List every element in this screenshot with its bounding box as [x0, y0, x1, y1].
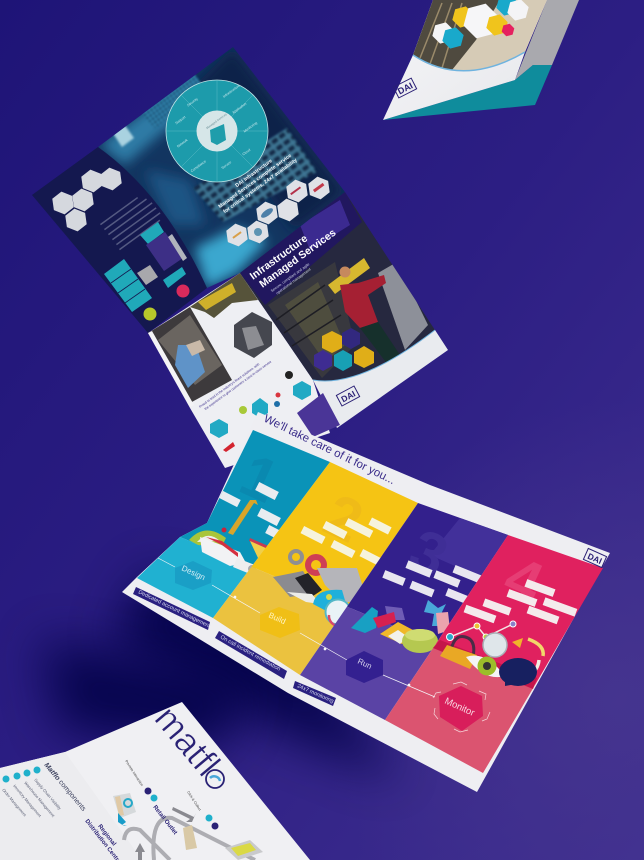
- text block: body copy: [100, 197, 161, 250]
- title: operational management: [275, 267, 313, 295]
- number 3: 3: [400, 516, 458, 591]
- logo: DAI: [393, 78, 417, 98]
- numbered list: Warehouse Management: [23, 780, 56, 819]
- illustration: servers and gears: [273, 551, 363, 626]
- title: [248, 217, 346, 302]
- wheel: services: Security: [186, 97, 199, 107]
- wheel: services: Infrastructure: [222, 84, 241, 99]
- hexagon: monitor: Monitor: [443, 696, 476, 719]
- heading: matflo components: Matflo components: [42, 762, 87, 813]
- service hexagons: [314, 328, 374, 371]
- label: dedicated account management: Dedicated account management: [137, 589, 211, 630]
- labels: [382, 560, 481, 604]
- column 1: design: [137, 430, 330, 618]
- panel: cover photo: [240, 192, 435, 380]
- text block: photo intro: DAI Infrastructure: [234, 158, 274, 189]
- diagram: distribution network: Regional: [96, 824, 117, 848]
- wheel: services: Support: [174, 115, 186, 125]
- labels: [219, 482, 289, 543]
- brochure: top right folded: [383, 0, 579, 120]
- numbered list: Inventory Management: [12, 783, 43, 819]
- panel: back panel white: [148, 273, 330, 468]
- hexagon: design: [175, 561, 212, 590]
- photo: yellow cables: [190, 273, 258, 318]
- illustration: run tools: [351, 600, 450, 653]
- hexagon: build: Build: [267, 611, 287, 626]
- panel: dark navy left: [32, 147, 207, 333]
- wheel: services: [166, 80, 268, 182]
- hexagon: monitor: [433, 682, 490, 732]
- logo: DAI: [583, 548, 607, 568]
- logo: DAI: DAI: [586, 551, 604, 566]
- illustration: monitor icons: [440, 621, 543, 686]
- icon: pink close badge: [176, 284, 190, 298]
- wheel: services: Monitoring: [243, 121, 258, 133]
- column 3: run: [300, 503, 508, 720]
- photo with hexagons: [413, 0, 547, 71]
- process boxes: [104, 222, 187, 312]
- labels: [464, 579, 577, 624]
- number 1: 1: [231, 441, 289, 516]
- hexagon: run: Run: [356, 657, 373, 671]
- text block: photo intro: Managed Services complete service: [218, 153, 293, 210]
- paper: [122, 412, 610, 792]
- logo: DAI: DAI: [396, 80, 414, 96]
- text block: photo intro: for critical systems, 24x7 availability: [222, 157, 299, 215]
- diagram: distribution network: Premise Interaction: [124, 759, 144, 787]
- diagram: distribution network: [83, 759, 263, 860]
- hexagons: services: [51, 166, 123, 233]
- label: on call incident remediation: [215, 631, 287, 679]
- paper: [0, 702, 310, 860]
- numbered list: [1, 766, 62, 819]
- diagram: distribution network: Click & Collect: [186, 790, 202, 811]
- panel: purple contact strip: [297, 393, 340, 437]
- number 4: 4: [495, 543, 553, 618]
- label: 24x7 monitoring: 24x7 monitoring: [296, 683, 334, 705]
- panel: server photo spread: [98, 47, 345, 288]
- timeline line: [158, 558, 435, 697]
- hexagon: design: Design: [180, 564, 207, 582]
- text: intro: the experience to give customers a best-in-class service: [204, 360, 272, 411]
- numbered list: Order Management: [1, 787, 28, 818]
- column 2: build: [213, 462, 418, 675]
- title: Managed Services: [257, 227, 339, 290]
- text: intro: Proud to lead in the industry's finest solutions, with: [198, 362, 260, 409]
- photo: engineers dark: [148, 307, 232, 403]
- title: Secure, compliant and agile: [270, 262, 310, 293]
- wheel: services: Network: [176, 138, 189, 148]
- icon: lime arrow badge: [144, 308, 156, 320]
- brochure: matflo: [0, 698, 310, 860]
- number 2: 2: [315, 481, 373, 556]
- wheel: services: Cloud: [242, 148, 251, 156]
- panel: cover white base: [313, 330, 448, 428]
- labels: [300, 517, 392, 567]
- client logo hexagons: [210, 371, 311, 452]
- wheel: services: Managed Services: [205, 112, 228, 130]
- logo: matflo: matfl: [147, 698, 228, 784]
- diagram: distribution network: Retail Outlet: [151, 805, 178, 836]
- illustration: design tools: [189, 500, 273, 578]
- photographed engineer: [340, 266, 402, 365]
- wheel: services: Service: [221, 160, 232, 170]
- brand hexagons: [225, 175, 331, 248]
- hexagon: build: [260, 607, 300, 638]
- numbered list: Supply Chain Visibility: [33, 777, 62, 811]
- wheel: services: Application: [232, 102, 247, 115]
- hexagon: run: [346, 651, 383, 683]
- title: Infrastructure: [248, 232, 310, 282]
- heading: We'll take care of it for you...: [262, 413, 397, 487]
- label: on call incident remediation: On call incident remediation: [219, 635, 281, 673]
- logo: DAI: DAI: [339, 389, 357, 404]
- white front panel: [383, 0, 547, 120]
- brochure: we'll take care of it for you: [122, 412, 610, 792]
- inner grey flap: [515, 0, 579, 80]
- column 4: monitor: [385, 535, 603, 773]
- photo: hexagon engineers: [234, 312, 272, 358]
- teal back panel: [383, 65, 552, 120]
- wheel: services: Compliance: [190, 159, 207, 173]
